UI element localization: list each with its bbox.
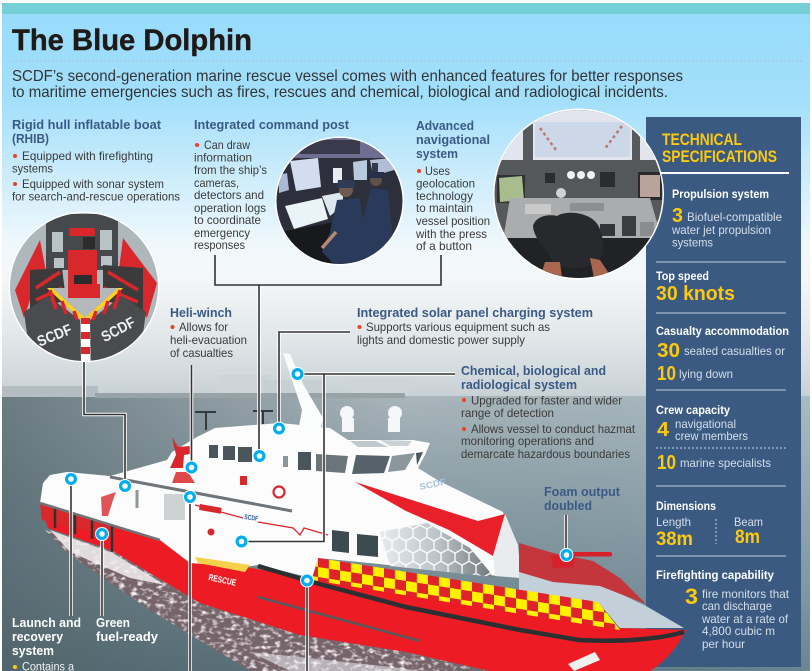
firefighting capability: water at a rate of — [701, 612, 789, 626]
checker band — [312, 558, 620, 630]
dimensions — [656, 499, 763, 550]
anchor — [568, 652, 600, 671]
text: launch and recovery system: Launch and — [12, 615, 81, 630]
gunwale — [258, 566, 684, 641]
heli-winch crane — [170, 437, 195, 483]
side windows — [332, 530, 378, 557]
intro text: to maritime emergencies such as fires, rescues and chemical, biological and radiological incidents. — [12, 84, 668, 101]
text: integrated command post: operation logs — [194, 201, 266, 215]
photo: navigation console — [493, 108, 665, 280]
rub rail — [258, 597, 420, 641]
firefighting capability: fire monitors that — [702, 587, 790, 601]
text: launch and recovery system: recovery — [12, 629, 64, 644]
text: green fuel-ready: fuel-ready — [96, 629, 159, 644]
searchlights — [340, 406, 402, 432]
firefighting capability: 3 — [685, 584, 698, 609]
top speed: Top speed — [656, 269, 709, 283]
foam monitor — [551, 552, 612, 568]
propulsion system — [671, 187, 782, 250]
photo: RHIB: SCDF — [35, 321, 75, 350]
crew capacity — [656, 403, 786, 474]
superstructure — [40, 423, 521, 578]
text: rigid hull inflatable boat: for search-and-rescue operations — [12, 190, 180, 204]
text: rigid hull inflatable boat: (RHIB) — [12, 131, 49, 146]
text: advanced navigational system: geolocation — [416, 176, 475, 190]
technical specifications panel — [646, 117, 801, 667]
text: chemical, biological and radiological system: range of detection — [461, 406, 554, 420]
crew capacity: 4 — [657, 419, 670, 441]
text: chemical, biological and radiological system: Allows vessel to conduct hazmat — [471, 422, 636, 436]
firefighting capability: Firefighting capability — [656, 568, 774, 582]
text: integrated command post: to coordinate — [194, 213, 261, 227]
dimensions: Length — [656, 515, 691, 529]
text: heli-winch: Allows for — [179, 320, 228, 334]
text: advanced navigational system — [415, 118, 490, 253]
top speed: 30 knots — [656, 283, 735, 305]
text: integrated solar panel charging system: Supports various equipment such as — [366, 320, 550, 334]
crew capacity: 10 — [657, 452, 676, 474]
text: integrated command post: Can draw — [204, 138, 250, 152]
wake — [40, 525, 500, 671]
text: integrated command post: Integrated command post — [194, 117, 350, 132]
text: foam output doubled: Foam output — [544, 484, 621, 499]
propulsion system: systems — [672, 236, 713, 250]
text: chemical, biological and radiological system: monitoring operations and — [461, 434, 594, 448]
text: chemical, biological and radiological system: demarcate hazardous boundaries — [461, 447, 630, 461]
connector lines — [71, 255, 566, 671]
dimensions: 8m — [735, 527, 760, 548]
text: rigid hull inflatable boat — [12, 117, 180, 204]
firefighting capability: per hour — [702, 637, 745, 651]
intro text — [12, 68, 683, 101]
SCDF mark on bow: SCDF — [418, 476, 447, 492]
text: chemical, biological and radiological system — [461, 363, 636, 461]
text: advanced navigational system: Uses — [425, 164, 450, 178]
dimensions: 38m — [656, 529, 693, 550]
firefighting capability: 4,800 cubic m — [702, 624, 775, 638]
text: advanced navigational system: technology — [416, 189, 473, 203]
top teal bar — [2, 3, 810, 14]
hull side window — [164, 494, 185, 520]
text: integrated solar panel charging system — [357, 305, 593, 347]
text: integrated solar panel charging system: Integrated solar panel charging system — [357, 305, 593, 320]
casualty accommodation: Casualty accommodation — [656, 324, 789, 338]
text: rigid hull inflatable boat: systems — [12, 162, 53, 176]
ship: SCDF — [244, 514, 259, 523]
text: integrated command post: responses — [194, 238, 245, 252]
text: green fuel-ready: Green — [96, 615, 130, 630]
photo: command post — [275, 136, 404, 266]
bridge windows — [209, 440, 423, 474]
text: advanced navigational system: with the press — [415, 227, 487, 241]
text: advanced navigational system: vessel position — [416, 214, 490, 228]
photo: RHIB — [8, 212, 160, 364]
text: heli-winch: of casualties — [170, 346, 233, 360]
foredeck — [519, 572, 684, 628]
red details — [101, 476, 284, 536]
panel heading: TECHNICAL — [662, 130, 742, 149]
text: rigid hull inflatable boat: Rigid hull inflatable boat — [12, 117, 162, 132]
text: advanced navigational system: navigational — [416, 132, 490, 147]
deck rail — [110, 477, 292, 511]
text: integrated solar panel charging system: lights and domestic power supply — [357, 333, 525, 347]
title: The Blue Dolphin — [12, 24, 252, 57]
mast — [283, 353, 323, 432]
text: launch and recovery system — [12, 615, 81, 671]
casualty accommodation: 30 — [657, 340, 680, 362]
firefighting capability: can discharge — [702, 599, 772, 613]
text: integrated command post: emergency — [194, 226, 250, 240]
text: integrated command post — [194, 117, 350, 252]
text: heli-winch: Heli-winch — [170, 305, 232, 320]
crew capacity: navigational — [675, 417, 736, 431]
text: chemical, biological and radiological system: Upgraded for faster and wider — [471, 394, 622, 408]
photo: RHIB: SCDF — [98, 314, 138, 346]
text: integrated command post: information — [194, 150, 252, 164]
propulsion system: 3 — [672, 205, 683, 227]
casualty accommodation: lying down — [679, 367, 733, 381]
text: launch and recovery system: system — [12, 643, 54, 658]
dimensions: Beam — [734, 515, 763, 529]
marker nodes — [64, 368, 573, 587]
text: heli-winch: heli-evacuation — [170, 333, 247, 347]
text: advanced navigational system: Advanced — [416, 118, 474, 133]
text: chemical, biological and radiological system: radiological system — [461, 377, 577, 392]
hull — [40, 503, 686, 671]
red hull stripe — [195, 505, 328, 535]
crew capacity: Crew capacity — [656, 403, 730, 417]
bulwark — [519, 543, 646, 604]
stern windows band — [40, 503, 115, 552]
text: rigid hull inflatable boat: Equipped with sonar system — [22, 177, 164, 191]
chevron stripe — [355, 482, 505, 556]
ship — [40, 353, 686, 671]
rescue label: RESCUE — [208, 572, 237, 588]
propulsion system: water jet propulsion — [671, 223, 771, 237]
text: chemical, biological and radiological system: Chemical, biological and — [461, 363, 606, 378]
intro text: SCDF’s second-generation marine rescue vessel comes with enhanced features for better responses — [12, 68, 683, 85]
text: integrated command post: detectors and — [194, 188, 264, 202]
casualty accommodation — [656, 324, 789, 385]
hex panel — [380, 523, 494, 577]
text: foam output doubled — [544, 484, 621, 513]
deck yellow rail — [195, 557, 250, 572]
text: rigid hull inflatable boat: Equipped with firefighting — [22, 149, 153, 163]
casualty accommodation: 10 — [657, 363, 676, 385]
text: advanced navigational system: of a button — [416, 239, 472, 253]
propulsion system: Propulsion system — [672, 187, 769, 201]
text: integrated command post: from the ship’s — [194, 163, 267, 177]
panel heading — [659, 130, 789, 174]
casualty accommodation: seated casualties or — [684, 344, 785, 358]
text: advanced navigational system: to maintain — [416, 201, 473, 215]
crew capacity: crew members — [675, 429, 748, 443]
radar arms — [195, 411, 273, 430]
text: foam output doubled: doubled — [544, 498, 592, 513]
text: integrated command post: cameras, — [194, 176, 239, 190]
dimensions: Dimensions — [656, 499, 716, 513]
panel heading: SPECIFICATIONS — [662, 147, 777, 166]
propulsion system: Biofuel-compatible — [687, 210, 782, 224]
crew capacity: marine specialists — [680, 456, 771, 470]
text: green fuel-ready — [96, 615, 159, 644]
text: heli-winch — [170, 305, 247, 360]
text: advanced navigational system: system — [416, 146, 458, 161]
top speed — [656, 269, 735, 305]
firefighting capability — [656, 568, 790, 651]
fin — [493, 514, 521, 578]
